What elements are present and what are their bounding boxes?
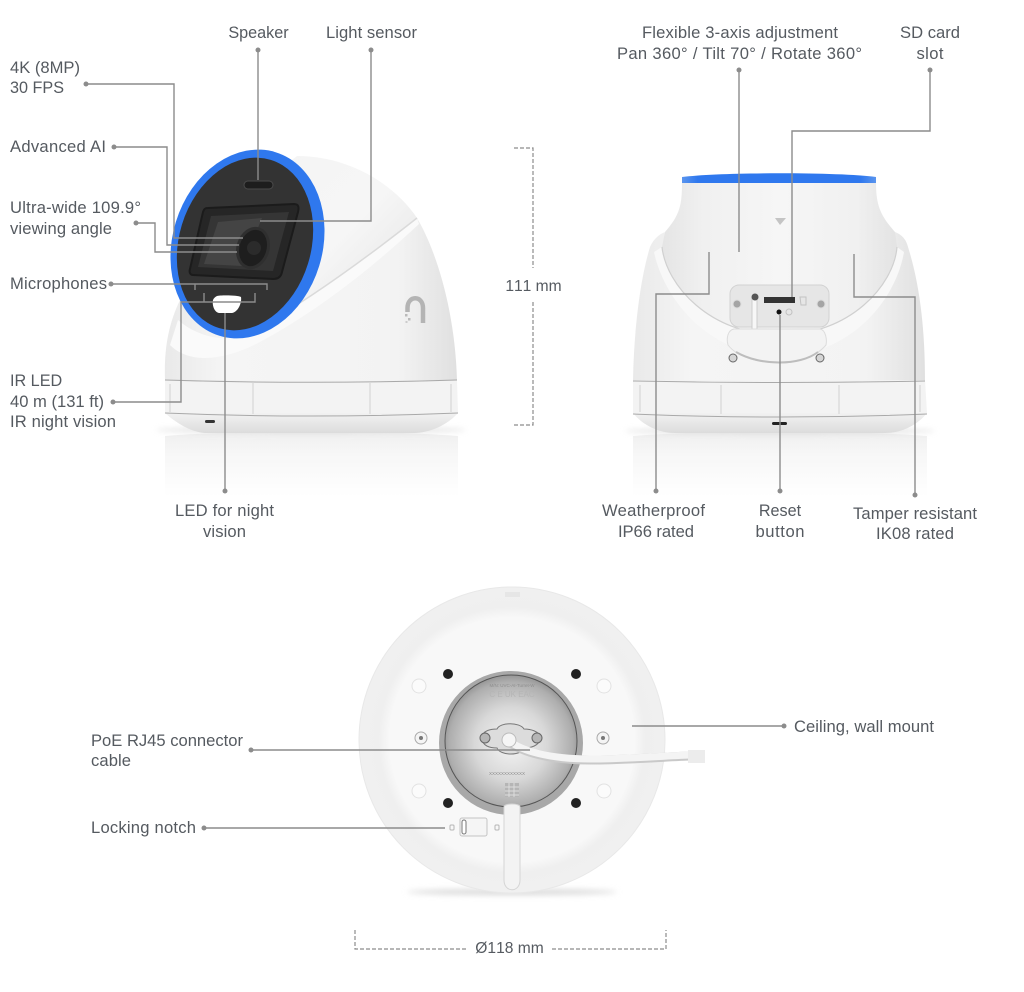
base foot <box>633 413 927 433</box>
callout: IR LED: IR LED <box>10 372 62 390</box>
callout: Light sensor: Light sensor <box>326 23 417 42</box>
cable <box>502 733 690 760</box>
collar edge <box>262 218 417 326</box>
outer disc <box>359 587 665 893</box>
cable stem <box>752 299 757 329</box>
QR label <box>505 783 519 797</box>
callout: Light sensor <box>260 23 417 221</box>
rating label text: XXXXXXXXXXXX <box>489 771 525 776</box>
lens <box>233 224 273 272</box>
callout: Tamper resistant: Tamper resistant <box>853 504 977 523</box>
callout: Speaker: Speaker <box>228 24 289 42</box>
well <box>439 671 583 815</box>
panel screws <box>733 300 741 308</box>
notch icons <box>450 825 499 830</box>
shell <box>165 218 457 380</box>
callout: Tamper resistant: IK08 rated <box>876 524 954 543</box>
callout: SD card slot <box>792 23 960 297</box>
dimension: diameter <box>355 930 666 957</box>
triangle mark <box>775 218 786 225</box>
top notch <box>505 592 520 597</box>
camera: underside view <box>359 587 705 895</box>
callout: Ceiling, wall mount: Ceiling, wall mount <box>794 717 934 736</box>
ground shadow <box>625 428 935 434</box>
rating label text: M/N: UVC-AI-Turret-W <box>489 683 535 688</box>
logo <box>405 298 423 323</box>
mounting holes <box>443 669 453 679</box>
camera: rear view <box>625 173 935 497</box>
port panel <box>730 285 829 327</box>
callout: Microphones <box>10 274 267 293</box>
mount plate <box>482 724 540 754</box>
dimension: height: 111 mm <box>505 278 562 295</box>
dark face <box>156 141 334 347</box>
callout: Flexible adjustment: Pan 360° / Tilt 70° / Rotate 360° <box>617 44 862 63</box>
callout: LED for night vision <box>175 313 274 541</box>
callout: Weatherproof <box>602 252 709 541</box>
callout: IR LED: 40 m (131 ft) <box>10 392 104 411</box>
stand tab <box>504 804 520 890</box>
dimension: diameter: Ø118 mm <box>475 940 544 957</box>
reflection under front camera <box>165 432 458 497</box>
callout: Flexible adjustment <box>617 23 862 252</box>
camera: side front view <box>148 130 466 497</box>
callout: Locking notch: Locking notch <box>91 818 196 837</box>
callout: IR LED: IR night vision <box>10 412 116 431</box>
reflection under rear camera <box>633 432 927 497</box>
rating label text <box>489 683 535 776</box>
callout: Reset button: Reset <box>759 502 802 520</box>
rating label text: C E UK EAC <box>489 690 535 699</box>
SD icon <box>800 297 806 305</box>
reset icon <box>786 309 792 315</box>
callout: PoE cable: PoE RJ45 connector <box>91 731 243 750</box>
callout: SD card slot: SD card <box>900 23 960 42</box>
blue ring <box>148 130 347 358</box>
cover shadow <box>736 352 818 362</box>
callout: 4K <box>10 58 243 238</box>
dome <box>240 156 420 340</box>
callout: Ultra-wide <box>10 198 237 252</box>
reset hole <box>776 310 782 314</box>
base foot <box>165 413 458 433</box>
ball edge <box>662 247 897 335</box>
callout: Tamper resistant <box>853 254 977 543</box>
dimension: height <box>505 148 562 425</box>
cover <box>727 329 826 363</box>
base ring <box>165 380 458 413</box>
callout: Ultra-wide: viewing angle <box>10 219 112 238</box>
callout: Advanced AI: Advanced AI <box>10 137 106 156</box>
callout: Locking notch <box>91 818 445 837</box>
collar highlight <box>170 218 419 358</box>
SD slot <box>764 297 795 303</box>
callout: LED for night vision: vision <box>203 522 246 541</box>
callout: PoE cable: cable <box>91 751 131 770</box>
lens window <box>190 204 299 279</box>
callout: Ultra-wide: Ultra-wide 109.9° <box>10 198 141 217</box>
speaker slot <box>244 181 273 189</box>
callout: Reset button <box>756 315 804 541</box>
bottom slot <box>772 422 787 425</box>
ball and neck <box>660 182 900 335</box>
callout: 4K: 30 FPS <box>10 79 64 97</box>
callout: 4K: 4K (8MP) <box>10 58 80 77</box>
callout: Reset button: button <box>756 522 804 541</box>
callout: Advanced AI <box>10 137 239 245</box>
RJ45 plug <box>688 750 705 763</box>
callout: Ceiling, wall mount <box>632 717 934 736</box>
locking notch <box>460 818 487 836</box>
callout: LED for night vision: LED for night <box>175 501 274 520</box>
recessed circles <box>412 679 426 693</box>
ground shadow <box>156 427 466 433</box>
callout: Microphones: Microphones <box>10 274 107 293</box>
LED window <box>213 295 241 313</box>
cover screws <box>729 354 737 362</box>
mount screws <box>480 733 490 743</box>
shadow <box>407 889 617 895</box>
callout: Speaker <box>228 24 289 180</box>
rear shell <box>633 232 925 380</box>
callout: IR LED <box>10 293 255 431</box>
side screws <box>415 732 427 744</box>
callout: Weatherproof: IP66 rated <box>618 522 694 541</box>
callout: Flexible adjustment: Flexible 3-axis adjustment <box>642 23 838 42</box>
callout: Weatherproof: Weatherproof <box>602 501 705 520</box>
port <box>205 420 215 423</box>
blue strip <box>682 173 876 183</box>
callout: SD card slot: slot <box>916 44 944 63</box>
callout: PoE cable <box>91 731 530 770</box>
collar inner band <box>654 247 904 356</box>
base ring <box>633 380 927 413</box>
